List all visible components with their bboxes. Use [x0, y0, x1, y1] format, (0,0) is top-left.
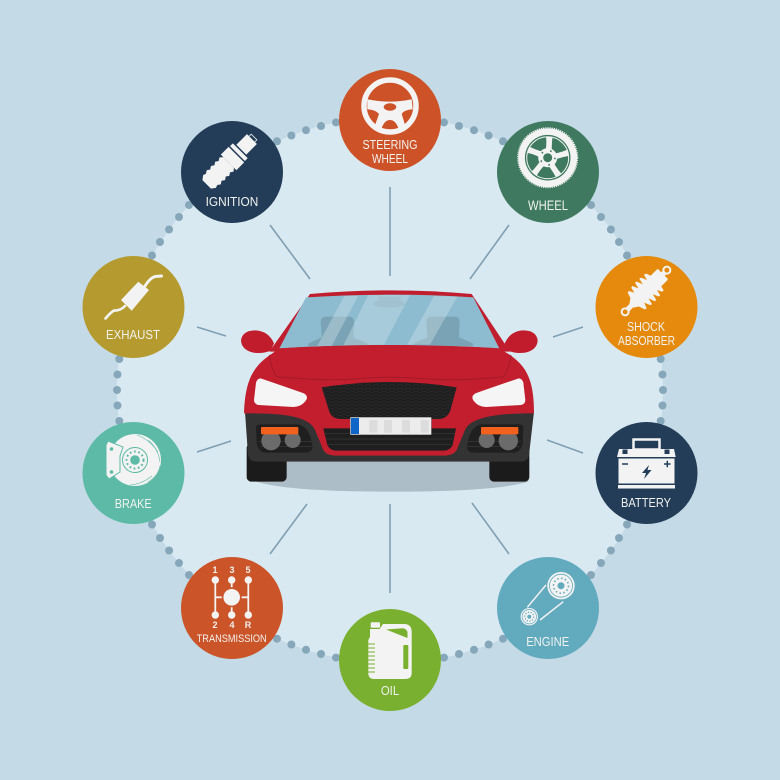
- hood line: [269, 355, 511, 380]
- icon: gear shift pattern: R: [245, 620, 252, 630]
- icon: gear shift pattern: 2: [212, 620, 218, 630]
- label: ignition: IGNITION: [206, 194, 258, 209]
- icon: steering wheel: [364, 80, 416, 132]
- dotted ring: [113, 118, 667, 662]
- label: battery: BATTERY: [621, 495, 671, 510]
- label: steering wheel: [362, 138, 418, 166]
- icon: gear shift pattern: [212, 565, 252, 630]
- badge: brake: [82, 422, 184, 524]
- badge: ignition: [181, 121, 283, 223]
- label: shock absorber: [618, 320, 675, 348]
- lower grille: [323, 428, 456, 451]
- left fog lamp housing: [256, 424, 312, 453]
- icon: battery: [617, 440, 676, 488]
- tyres: [247, 443, 529, 482]
- badge: steering wheel: [339, 69, 441, 171]
- badge: exhaust: [82, 256, 184, 358]
- right fog lamp housing: [467, 424, 523, 453]
- icon: gear shift pattern: 4: [229, 620, 235, 630]
- icon: gear shift pattern: 5: [245, 565, 251, 575]
- icon: spark plug: [199, 129, 262, 192]
- inner light circle: [117, 117, 663, 663]
- seats: [308, 317, 473, 346]
- icon: gear shift pattern: 1: [212, 565, 218, 575]
- label: wheel: WHEEL: [528, 198, 568, 213]
- grille: [322, 382, 457, 419]
- icon: shock absorber: [613, 258, 679, 324]
- left headlight: [254, 378, 307, 407]
- icon: gear shift pattern: 3: [229, 565, 235, 575]
- windshield frame: [269, 290, 510, 352]
- icon: oil canister: [368, 622, 412, 679]
- label: steering wheel: STEERING: [362, 138, 418, 152]
- label: steering wheel: WHEEL: [372, 152, 408, 166]
- badge: battery: [596, 422, 698, 524]
- icon: brake disc: [106, 434, 161, 486]
- number plate: [350, 417, 431, 435]
- rear view mirror: [373, 297, 405, 307]
- label: exhaust: EXHAUST: [106, 327, 160, 342]
- label: transmission: TRANSMISSION: [197, 633, 267, 645]
- icon: wheel: [518, 128, 578, 188]
- windshield reflections: [317, 295, 457, 346]
- badge: shock absorber: [596, 256, 698, 358]
- left mirror: [241, 330, 274, 353]
- label: shock absorber: SHOCK: [627, 320, 666, 334]
- car illustration: [241, 290, 538, 492]
- windshield glass: [279, 295, 499, 348]
- icon: engine belt: [521, 572, 575, 625]
- label: shock absorber: ABSORBER: [618, 334, 675, 348]
- badge: engine: [497, 557, 599, 659]
- label: oil: OIL: [381, 683, 399, 698]
- car body: [244, 345, 534, 456]
- right headlight: [472, 378, 525, 407]
- label: engine: ENGINE: [526, 634, 569, 649]
- badge: wheel: [497, 121, 599, 223]
- right mirror: [505, 330, 538, 353]
- badge: transmission: [181, 557, 283, 659]
- label: brake: BRAKE: [115, 496, 152, 511]
- bumper: [245, 412, 534, 462]
- car shadow: [252, 462, 528, 492]
- icon: exhaust muffler: [106, 276, 162, 318]
- badge: oil: [339, 609, 441, 711]
- connector lines: [197, 187, 583, 593]
